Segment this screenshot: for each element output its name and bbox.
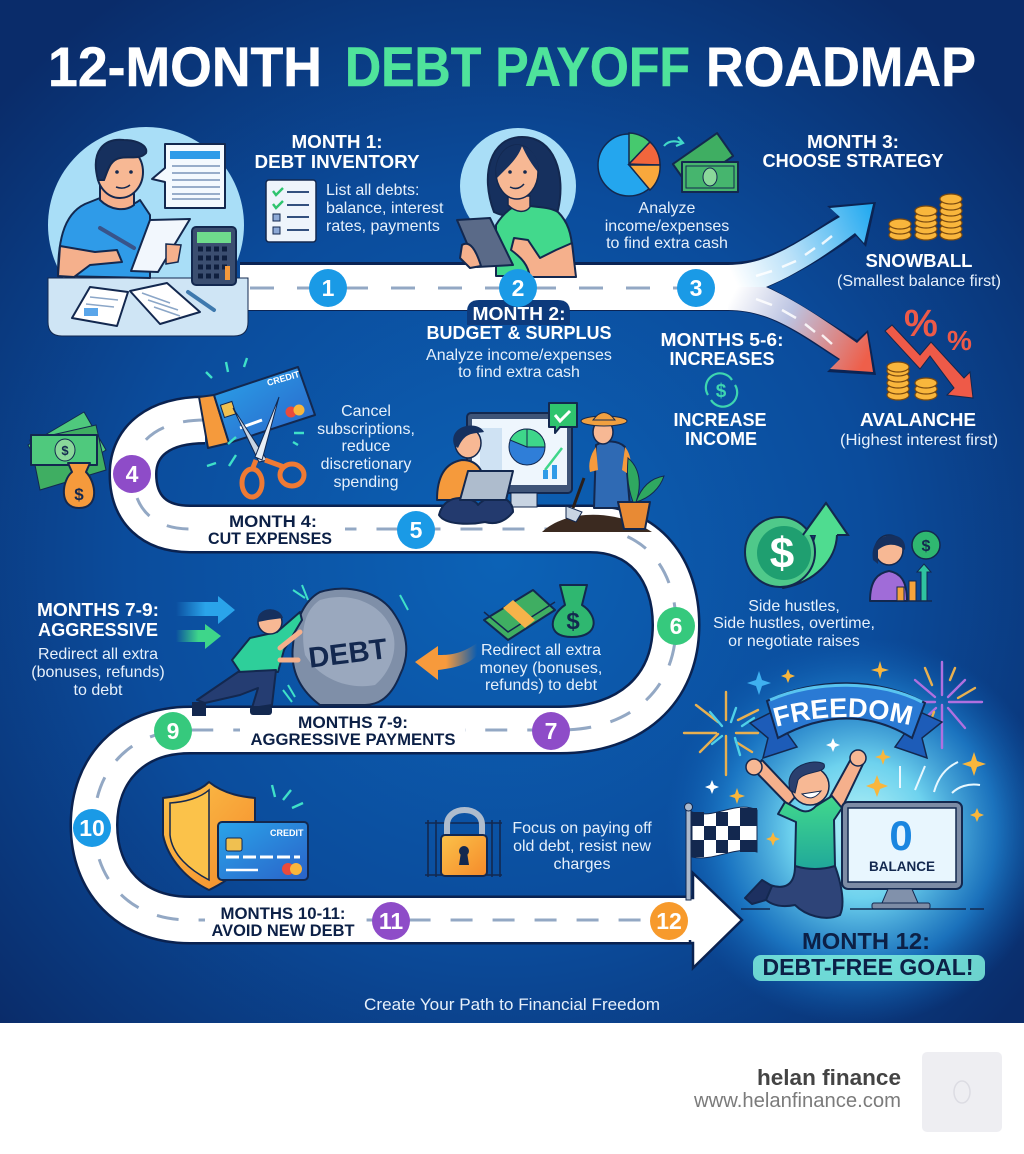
label: month 2: BUDGET & SURPLUS: [426, 323, 612, 343]
label: month 12 debt-free goal: [753, 928, 985, 981]
label: month 2: to find extra cash: [458, 364, 580, 381]
papers on desk: [72, 287, 128, 326]
step markers: 5: [410, 517, 423, 543]
icon: snowball coins: [889, 194, 962, 240]
text: cancel subscriptions: subscriptions,: [317, 421, 415, 438]
heading and text: months 7-9 aggressive: MONTHS 7-9:: [37, 600, 159, 620]
illustration: laptop person and monitor: [437, 403, 664, 532]
icon: increase income: $: [716, 381, 727, 402]
icon: shield and credit card: [163, 782, 308, 890]
icon: avalanche percent arrow: %: [904, 303, 938, 345]
text: focus on paying: Focus on paying off: [512, 820, 652, 837]
illustration: man pushing boulder: [192, 609, 302, 716]
road: months 1-3 with fork: [240, 202, 876, 375]
icon: checklist: [266, 180, 316, 242]
title: 12-MONTH: [48, 35, 322, 98]
icon: cash stack and bag: [484, 585, 594, 640]
icon: dollar with up arrow: $: [770, 529, 794, 578]
person with laptop: [437, 460, 486, 500]
step markers: 3: [690, 275, 702, 301]
step markers: [73, 269, 715, 940]
illustration: jumping man: [745, 750, 866, 918]
label: months 7-9 aggressive payments: MONTHS 7-9:: [298, 713, 408, 732]
step markers: 10: [79, 815, 105, 841]
text: list all debts: rates, payments: [326, 218, 440, 235]
icon: debt boulder: [283, 585, 408, 705]
monitor: zero balance: BALANCE: [869, 859, 935, 874]
text: analyze income top: to find extra cash: [606, 235, 728, 252]
text: increase income: INCREASE: [673, 410, 767, 430]
heading and text: months 7-9 aggressive: Redirect all extra: [38, 646, 158, 663]
text: focus on paying: charges: [554, 856, 610, 873]
title: DEBT PAYOFF: [345, 35, 690, 98]
heading and text: months 7-9 aggressive: to debt: [74, 682, 123, 699]
footer brand: www.helanfinance.com: [693, 1090, 901, 1112]
icon: increase income: [706, 373, 737, 407]
heading: month 1: DEBT INVENTORY: [254, 152, 420, 172]
step markers: 11: [379, 908, 403, 934]
caption: Create Your Path to Financial Freedom: [364, 995, 660, 1014]
icon: cash and money bag: $: [61, 443, 69, 458]
text: list all debts: List all debts:: [326, 182, 419, 199]
step markers: 9: [167, 718, 179, 744]
step markers: 7: [545, 718, 557, 744]
label: month 4: MONTH 4:: [229, 512, 317, 531]
heading: month 3: MONTH 3:: [807, 132, 899, 152]
gardener: [594, 441, 630, 508]
icon: pie chart and cash: [598, 133, 738, 196]
label: month 2: [426, 300, 612, 381]
step markers: 1: [322, 275, 335, 301]
illustration: woman with tablet: [457, 128, 576, 277]
arrows: momentum: [176, 596, 235, 649]
speech bubble: [152, 144, 225, 208]
text: side hustles: Side hustles, overtime,: [713, 615, 875, 632]
heading and text: months 7-9 aggressive: [31, 600, 165, 699]
heading: months 5-6: [660, 330, 784, 369]
text: redirect extra money: [480, 642, 602, 694]
text: side hustles: or negotiate raises: [728, 633, 860, 650]
icon: cash and money bag: $: [74, 485, 84, 504]
heading: months 5-6: INCREASES: [669, 349, 775, 369]
text: avalanche: [840, 410, 998, 449]
label: month 2: MONTH 2:: [472, 304, 566, 324]
heading: month 1: [254, 132, 420, 172]
icon: credit card and scissors: CREDIT: [266, 369, 301, 388]
icon: person with chart: [870, 531, 940, 601]
fireworks: [684, 662, 982, 775]
icon: padlock and fence: [425, 810, 502, 877]
man in blue shirt: [58, 198, 150, 278]
label: month 12 debt-free goal: MONTH 12:: [802, 928, 930, 954]
icon: checkered flag: [684, 803, 757, 900]
text: cancel subscriptions: Cancel: [341, 403, 391, 420]
text: analyze income top: [605, 200, 729, 252]
title: ROADMAP: [706, 35, 976, 98]
label: months 10-11: MONTHS 10-11:: [220, 904, 346, 923]
text: list all debts: [326, 182, 444, 235]
text: analyze income top: Analyze: [639, 200, 696, 217]
text: redirect extra money: refunds) to debt: [485, 677, 598, 694]
desk: [48, 278, 248, 336]
icon: shield and credit card: CREDIT: [270, 828, 304, 838]
label: month 4: CUT EXPENSES: [208, 529, 332, 548]
text: cancel subscriptions: [317, 403, 415, 491]
label: months 10-11: [212, 904, 355, 940]
road: months 4-12 winding path: [94, 420, 742, 968]
banner: freedom: [748, 682, 944, 759]
text: list all debts: balance, interest: [326, 200, 444, 217]
heading: month 3: CHOOSE STRATEGY: [762, 151, 944, 171]
label: month 4: [208, 512, 332, 548]
step markers: 4: [126, 461, 139, 487]
icon: cash and money bag: [28, 412, 106, 508]
dirt mound: [542, 515, 652, 532]
label: months 7-9 aggressive payments: [250, 713, 456, 749]
text: avalanche: AVALANCHE: [860, 410, 976, 430]
text: cancel subscriptions: discretionary: [321, 456, 411, 473]
icon: avalanche percent arrow: %: [947, 325, 972, 356]
banner: freedom: FREEDOM: [773, 698, 912, 726]
text: snowball: (Smallest balance first): [837, 273, 1001, 290]
heading: month 3: [762, 132, 944, 171]
text: increase income: [673, 410, 767, 449]
icon: cash stack and bag: $: [566, 608, 580, 635]
label: months 7-9 aggressive payments: AGGRESSIVE PAYMENTS: [250, 730, 456, 749]
text: redirect extra money: money (bonuses,: [480, 660, 602, 677]
step markers: 2: [512, 275, 524, 301]
title: [48, 35, 976, 98]
text: focus on paying: [512, 820, 652, 873]
text: redirect extra money: Redirect all extra: [481, 642, 601, 659]
text: cancel subscriptions: reduce: [342, 438, 391, 455]
label: month 2: Analyze income/expenses: [426, 347, 612, 364]
calculator: [192, 227, 236, 285]
monitor: zero balance: [741, 802, 984, 909]
icon: debt boulder: DEBT: [307, 633, 389, 675]
text: analyze income top: income/expenses: [605, 218, 729, 235]
icon: sparkles: [705, 661, 986, 846]
goal glow: [640, 640, 1024, 1023]
heading and text: months 7-9 aggressive: (bonuses, refunds): [31, 664, 165, 681]
arrow: orange into debt: [415, 643, 477, 680]
text: increase income: INCOME: [685, 429, 757, 449]
footer logo: [922, 1052, 1002, 1132]
icon: dollar with up arrow: [745, 503, 848, 588]
heading and text: months 7-9 aggressive: AGGRESSIVE: [38, 620, 158, 640]
text: focus on paying: old debt, resist new: [513, 838, 651, 855]
icon: avalanche percent arrow: [885, 303, 973, 400]
footer brand: [0, 1023, 1024, 1154]
label: months 10-11: AVOID NEW DEBT: [212, 921, 355, 940]
text: side hustles: Side hustles,: [748, 598, 840, 615]
monitor: zero balance: 0: [889, 812, 913, 859]
text: cancel subscriptions: spending: [334, 474, 398, 491]
heading: months 5-6: MONTHS 5-6:: [660, 330, 784, 350]
label: month 12 debt-free goal: DEBT-FREE GOAL!: [762, 954, 974, 980]
heading: month 1: MONTH 1:: [292, 132, 382, 152]
text: avalanche: (Highest interest first): [840, 432, 998, 449]
footer brand: helan finance: [757, 1065, 901, 1090]
icon: credit card and scissors: [199, 358, 315, 497]
panel: month 1 illustration: [48, 127, 248, 336]
paper: [131, 219, 190, 272]
step markers: 12: [656, 908, 682, 934]
plant: [618, 502, 650, 529]
step markers: 6: [670, 613, 682, 639]
text: side hustles: [713, 598, 875, 650]
text: snowball: [837, 251, 1001, 290]
icon: person with chart: $: [922, 538, 931, 555]
text: snowball: SNOWBALL: [866, 251, 973, 271]
